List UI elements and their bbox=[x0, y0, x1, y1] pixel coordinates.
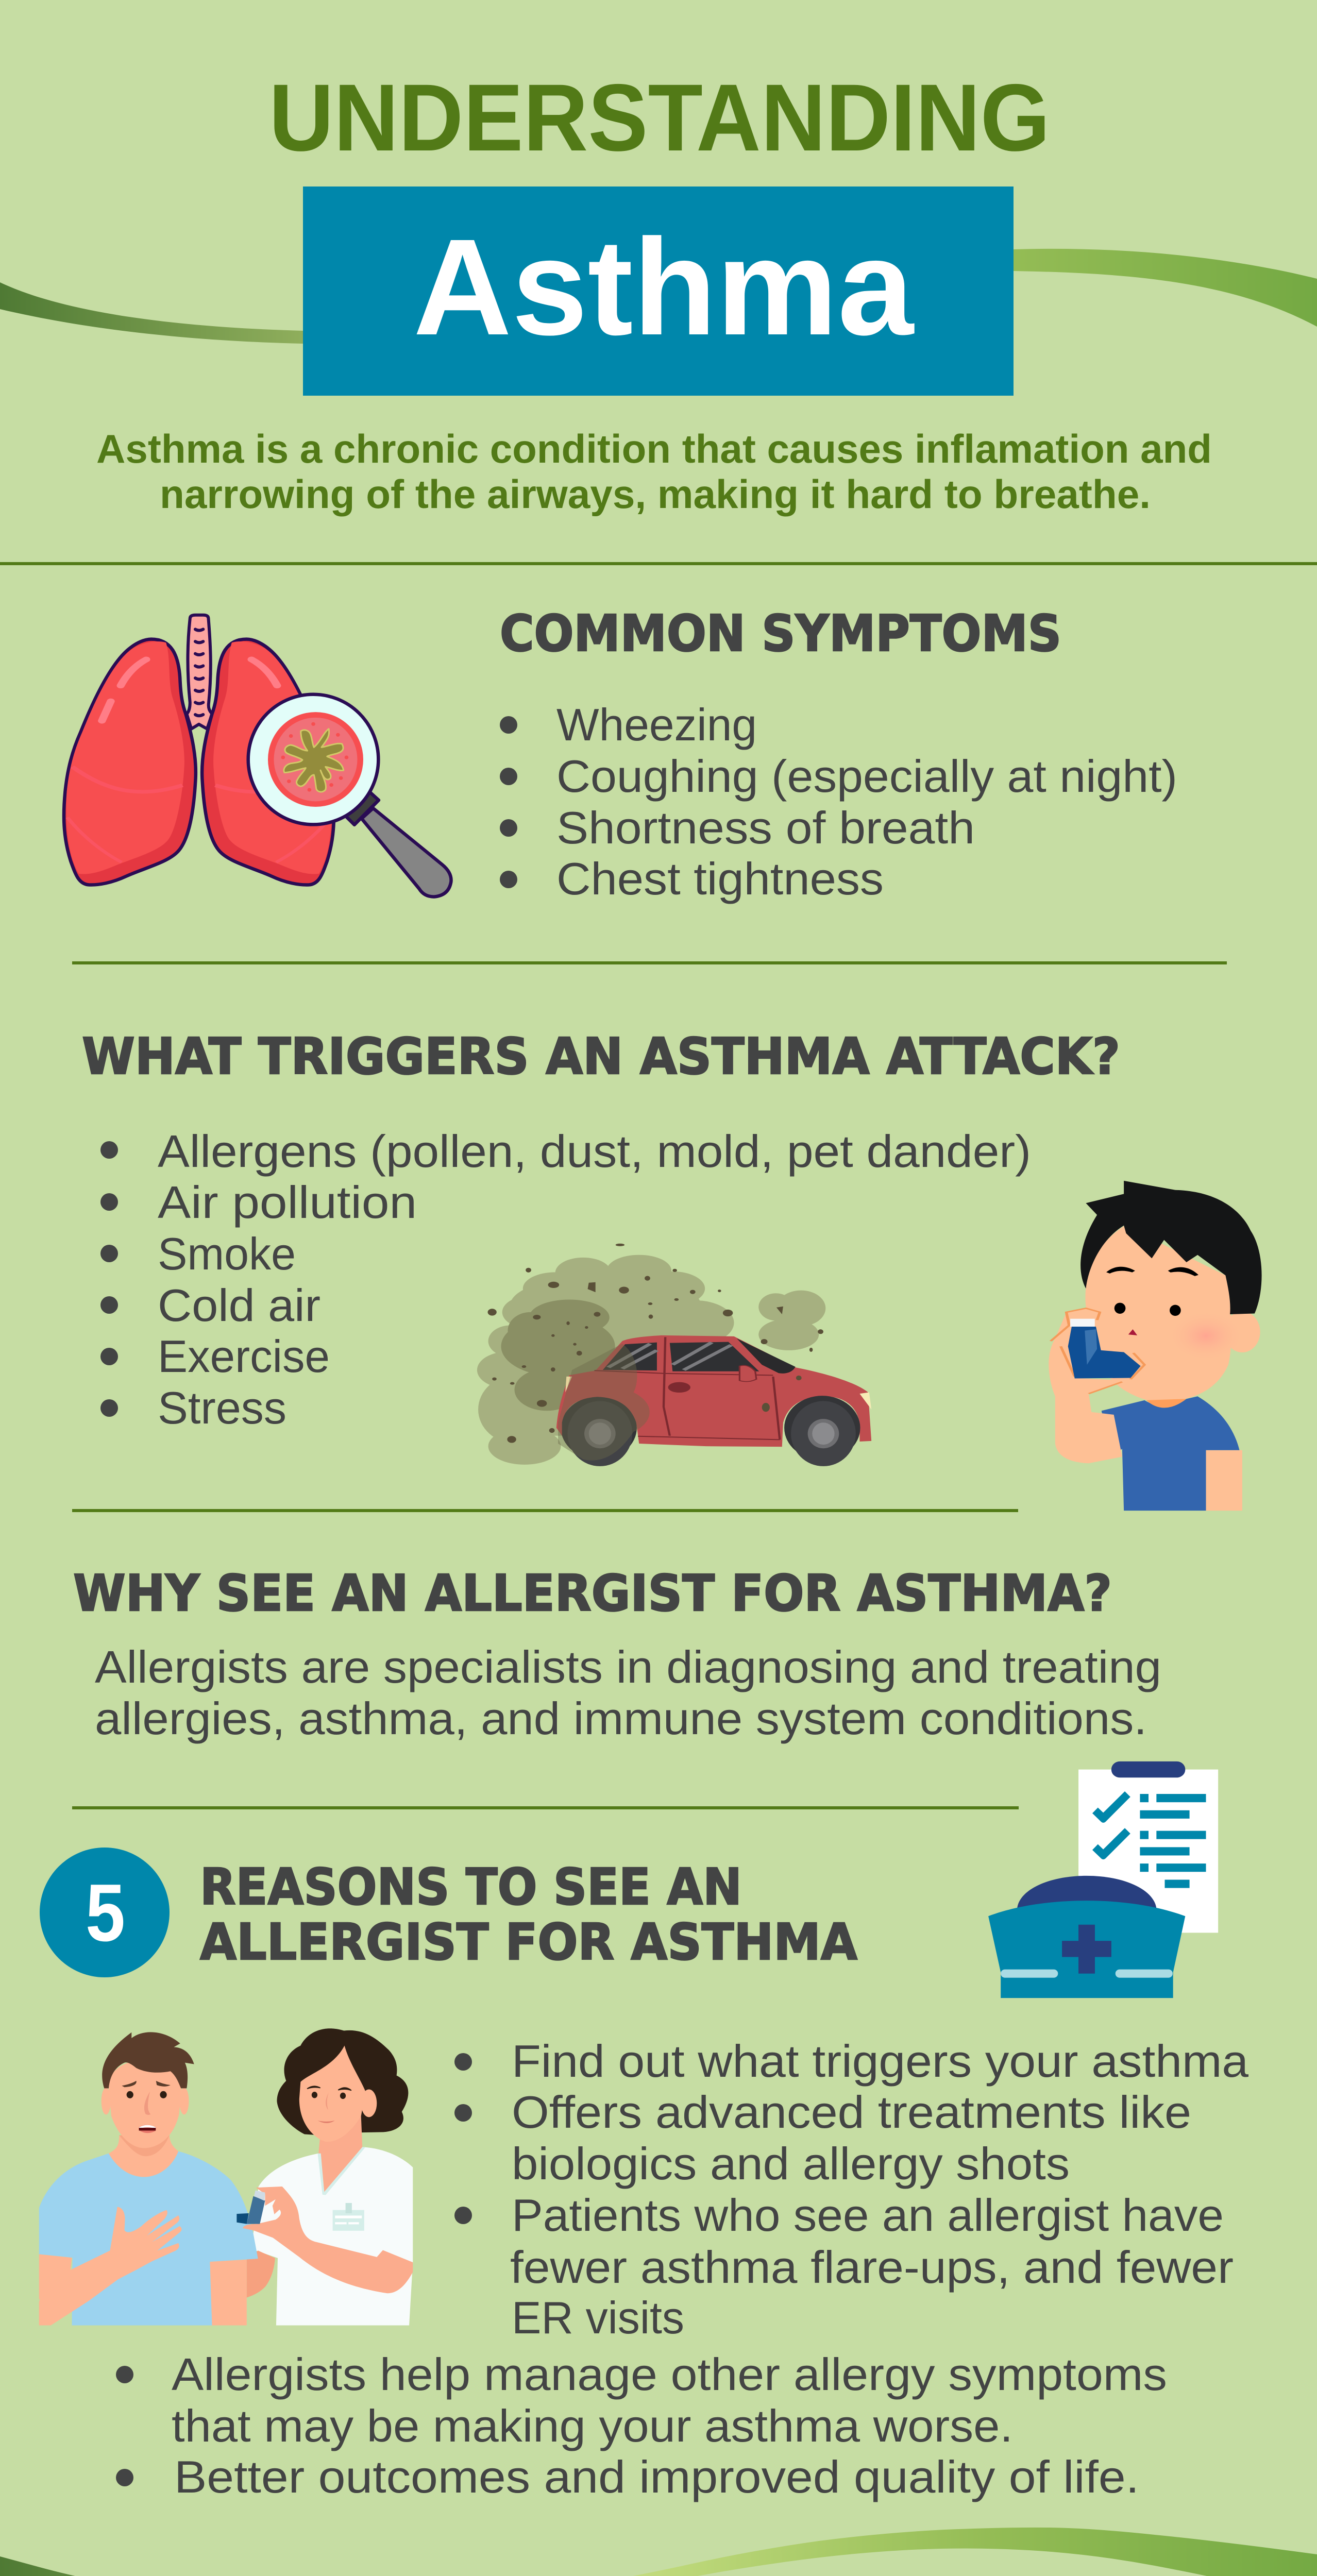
patient left arm bbox=[39, 2254, 72, 2300]
neck bbox=[1146, 1399, 1187, 1408]
inhaler bbox=[237, 2190, 265, 2224]
right lung bbox=[202, 639, 334, 885]
reasons list: Better outcomes and improved quality of life. bbox=[174, 2451, 1139, 2502]
symptoms list: Wheezing bbox=[556, 699, 757, 750]
clipboard bbox=[1078, 1761, 1218, 1933]
trachea bbox=[187, 615, 212, 729]
patient hand bbox=[39, 2207, 181, 2325]
car wheels arches bbox=[561, 1396, 637, 1460]
symptoms list: Coughing (especially at night) bbox=[556, 751, 1177, 802]
triggers list: Smoke bbox=[158, 1228, 296, 1279]
dark smoke bbox=[501, 1299, 639, 1411]
patient neck bbox=[109, 2136, 178, 2177]
right swoosh bbox=[1014, 249, 1317, 327]
magnifier handle bbox=[362, 808, 451, 897]
magnifier neck bbox=[346, 792, 379, 825]
car trim bbox=[595, 1337, 780, 1439]
name badge bbox=[333, 2203, 364, 2231]
front wheel bbox=[784, 1396, 860, 1466]
facial features bbox=[1108, 1268, 1196, 1335]
reasons list bbox=[116, 2036, 1248, 2502]
heading: why see an allergist: WHY SEE AN ALLERGIST FOR ASTHMA? bbox=[73, 1564, 1112, 1622]
nurse cap bbox=[988, 1876, 1185, 1998]
reasons list: Find out what triggers your asthma bbox=[512, 2036, 1248, 2087]
nurse arm and hand bbox=[243, 2187, 413, 2293]
nurse neck bbox=[318, 2116, 362, 2194]
shirt bbox=[1102, 1396, 1240, 1511]
paragraph: allergies, asthma, and immune system conditions. bbox=[95, 1693, 1147, 1744]
face bbox=[1085, 1226, 1231, 1401]
patient ears bbox=[102, 2088, 111, 2114]
inhaler bbox=[1068, 1319, 1141, 1379]
heading: five reasons: REASONS TO SEE AN bbox=[200, 1858, 742, 1916]
triggers list: Allergens (pollen, dust, mold, pet dander) bbox=[158, 1126, 1031, 1177]
triggers list: Cold air bbox=[158, 1280, 320, 1331]
collar trim bbox=[318, 2147, 365, 2195]
heading: five reasons bbox=[200, 1858, 857, 1971]
symptoms list: Chest tightness bbox=[556, 853, 884, 904]
paragraph bbox=[95, 1641, 1161, 1744]
left lung bbox=[64, 639, 196, 885]
nurse features bbox=[307, 2086, 351, 2123]
nurse far arm bbox=[247, 2250, 275, 2298]
icon: clipboard and nurse cap bbox=[988, 1761, 1218, 1998]
intro text: narrowing of the airways, making it hard to breathe. bbox=[160, 471, 1151, 517]
panel: why see an allergist bbox=[73, 1564, 1161, 1744]
header panel bbox=[0, 65, 1317, 517]
heading: common symptoms: COMMON SYMPTOMS bbox=[500, 604, 1061, 663]
cheek bbox=[1167, 1310, 1245, 1362]
hair bbox=[1080, 1181, 1262, 1314]
triggers list: Air pollution bbox=[158, 1177, 417, 1228]
panel: common symptoms bbox=[64, 604, 1177, 904]
nurse hair bbox=[277, 2028, 408, 2136]
magnifier lens bbox=[248, 694, 378, 824]
icon: lungs with magnifying glass bbox=[64, 615, 451, 897]
intro text: Asthma is a chronic condition that causes inflamation and bbox=[96, 426, 1212, 471]
triggers list: Stress bbox=[158, 1382, 286, 1433]
triggers list bbox=[100, 1126, 1031, 1433]
car windows bbox=[603, 1338, 796, 1374]
patient features bbox=[122, 2081, 171, 2133]
badge: number 5 bbox=[40, 1848, 170, 1977]
left swoosh bbox=[0, 282, 303, 344]
patient face bbox=[109, 2063, 181, 2148]
nurse ear bbox=[361, 2089, 377, 2117]
light smoke bbox=[477, 1255, 825, 1465]
badge: number 5: 5 bbox=[86, 1868, 125, 1958]
soot particles bbox=[487, 1244, 823, 1443]
reasons list: Allergists help manage other allergy symptoms bbox=[172, 2349, 1167, 2400]
icon: car with exhaust smoke bbox=[477, 1244, 871, 1466]
symptoms list bbox=[500, 699, 1177, 904]
patient hair bbox=[102, 2032, 194, 2088]
finger outlines bbox=[1051, 1308, 1144, 1394]
car body bbox=[556, 1335, 871, 1447]
paragraph: Allergists are specialists in diagnosing and treating bbox=[95, 1641, 1161, 1692]
heading: five reasons: ALLERGIST FOR ASTHMA bbox=[200, 1913, 857, 1971]
triggers list: Exercise bbox=[158, 1331, 330, 1382]
reasons list: Patients who see an allergist have bbox=[512, 2190, 1224, 2241]
patient shirt bbox=[39, 2151, 258, 2325]
reasons list: ER visits bbox=[512, 2292, 684, 2343]
airway cross-section bbox=[268, 712, 363, 807]
patient right arm bbox=[210, 2260, 247, 2325]
reasons list: that may be making your asthma worse. bbox=[172, 2400, 1013, 2451]
smoke overlay on car bbox=[558, 1344, 650, 1461]
nurse face bbox=[299, 2045, 365, 2142]
reasons list: fewer asthma flare-ups, and fewer bbox=[510, 2242, 1234, 2293]
bottom swoosh bbox=[0, 2528, 1317, 2576]
title box: asthma bbox=[303, 187, 1014, 396]
illustration: boy using inhaler bbox=[1049, 1181, 1262, 1511]
illustration: patient and nurse bbox=[39, 2028, 413, 2325]
far arm and ear bbox=[1206, 1450, 1242, 1511]
nurse uniform bbox=[254, 2147, 413, 2325]
reasons list: biologics and allergy shots bbox=[512, 2138, 1070, 2189]
reasons list: Offers advanced treatments like bbox=[512, 2087, 1191, 2138]
title box: asthma: Asthma bbox=[413, 211, 915, 364]
rear wheel bbox=[567, 1401, 632, 1466]
panel: triggers bbox=[82, 1027, 1262, 1511]
heading: triggers: WHAT TRIGGERS AN ASTHMA ATTACK? bbox=[82, 1027, 1120, 1086]
arm and hand bbox=[1049, 1308, 1125, 1463]
panel: five reasons bbox=[39, 1761, 1248, 2502]
title: understanding: UNDERSTANDING bbox=[269, 65, 1050, 171]
intro text bbox=[96, 426, 1212, 517]
symptoms list: Shortness of breath bbox=[556, 802, 975, 853]
